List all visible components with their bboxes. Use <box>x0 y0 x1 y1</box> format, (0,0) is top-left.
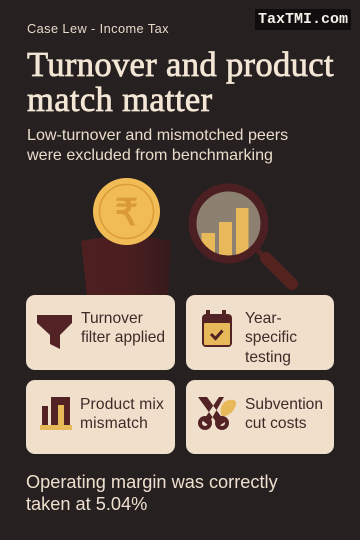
card: product mix mismatch <box>26 380 175 454</box>
card text: Year- <box>245 310 282 327</box>
subtitle: were excluded from benchmarking <box>27 146 273 164</box>
icon: product bars <box>40 397 72 430</box>
subtitle: Low-turnover and mismotched peers <box>27 126 288 144</box>
card text <box>80 396 164 432</box>
card text <box>81 310 165 346</box>
title: match matter <box>27 80 212 118</box>
card text <box>245 396 323 432</box>
card text: cut costs <box>245 415 307 432</box>
illustration: coin, pot and magnifier <box>81 178 298 295</box>
case label: Case Lew - Income Tax <box>27 21 169 36</box>
title: Turnover and product <box>27 46 334 84</box>
card text: Subvention <box>245 396 323 413</box>
icon: pot <box>81 236 171 295</box>
card text: filter applied <box>81 329 165 346</box>
card text: specific <box>245 329 297 346</box>
card: year-specific testing <box>186 295 334 370</box>
subtitle <box>27 126 288 164</box>
conclusion: Operating margin was correctly <box>26 472 278 492</box>
icon: rupee coin: ₹ <box>115 191 138 234</box>
title <box>27 46 334 118</box>
icon: rupee coin <box>93 178 160 245</box>
card: turnover filter <box>26 295 175 370</box>
conclusion: taken at 5.04% <box>26 494 147 514</box>
icon: magnifier with bars <box>192 188 292 284</box>
card: subvention cut costs <box>186 380 334 454</box>
icon: scissors with leaf <box>198 397 236 430</box>
card text: Product mix <box>80 396 164 413</box>
icon: calendar <box>202 310 232 347</box>
card text: Turnover <box>81 310 143 327</box>
icon: funnel <box>37 315 72 349</box>
card text: testing <box>245 349 291 366</box>
conclusion <box>26 472 278 514</box>
logo: TaxTMI.com: TaxTMI.com <box>258 11 348 28</box>
card text: mismatch <box>80 415 148 432</box>
card text <box>245 310 297 366</box>
